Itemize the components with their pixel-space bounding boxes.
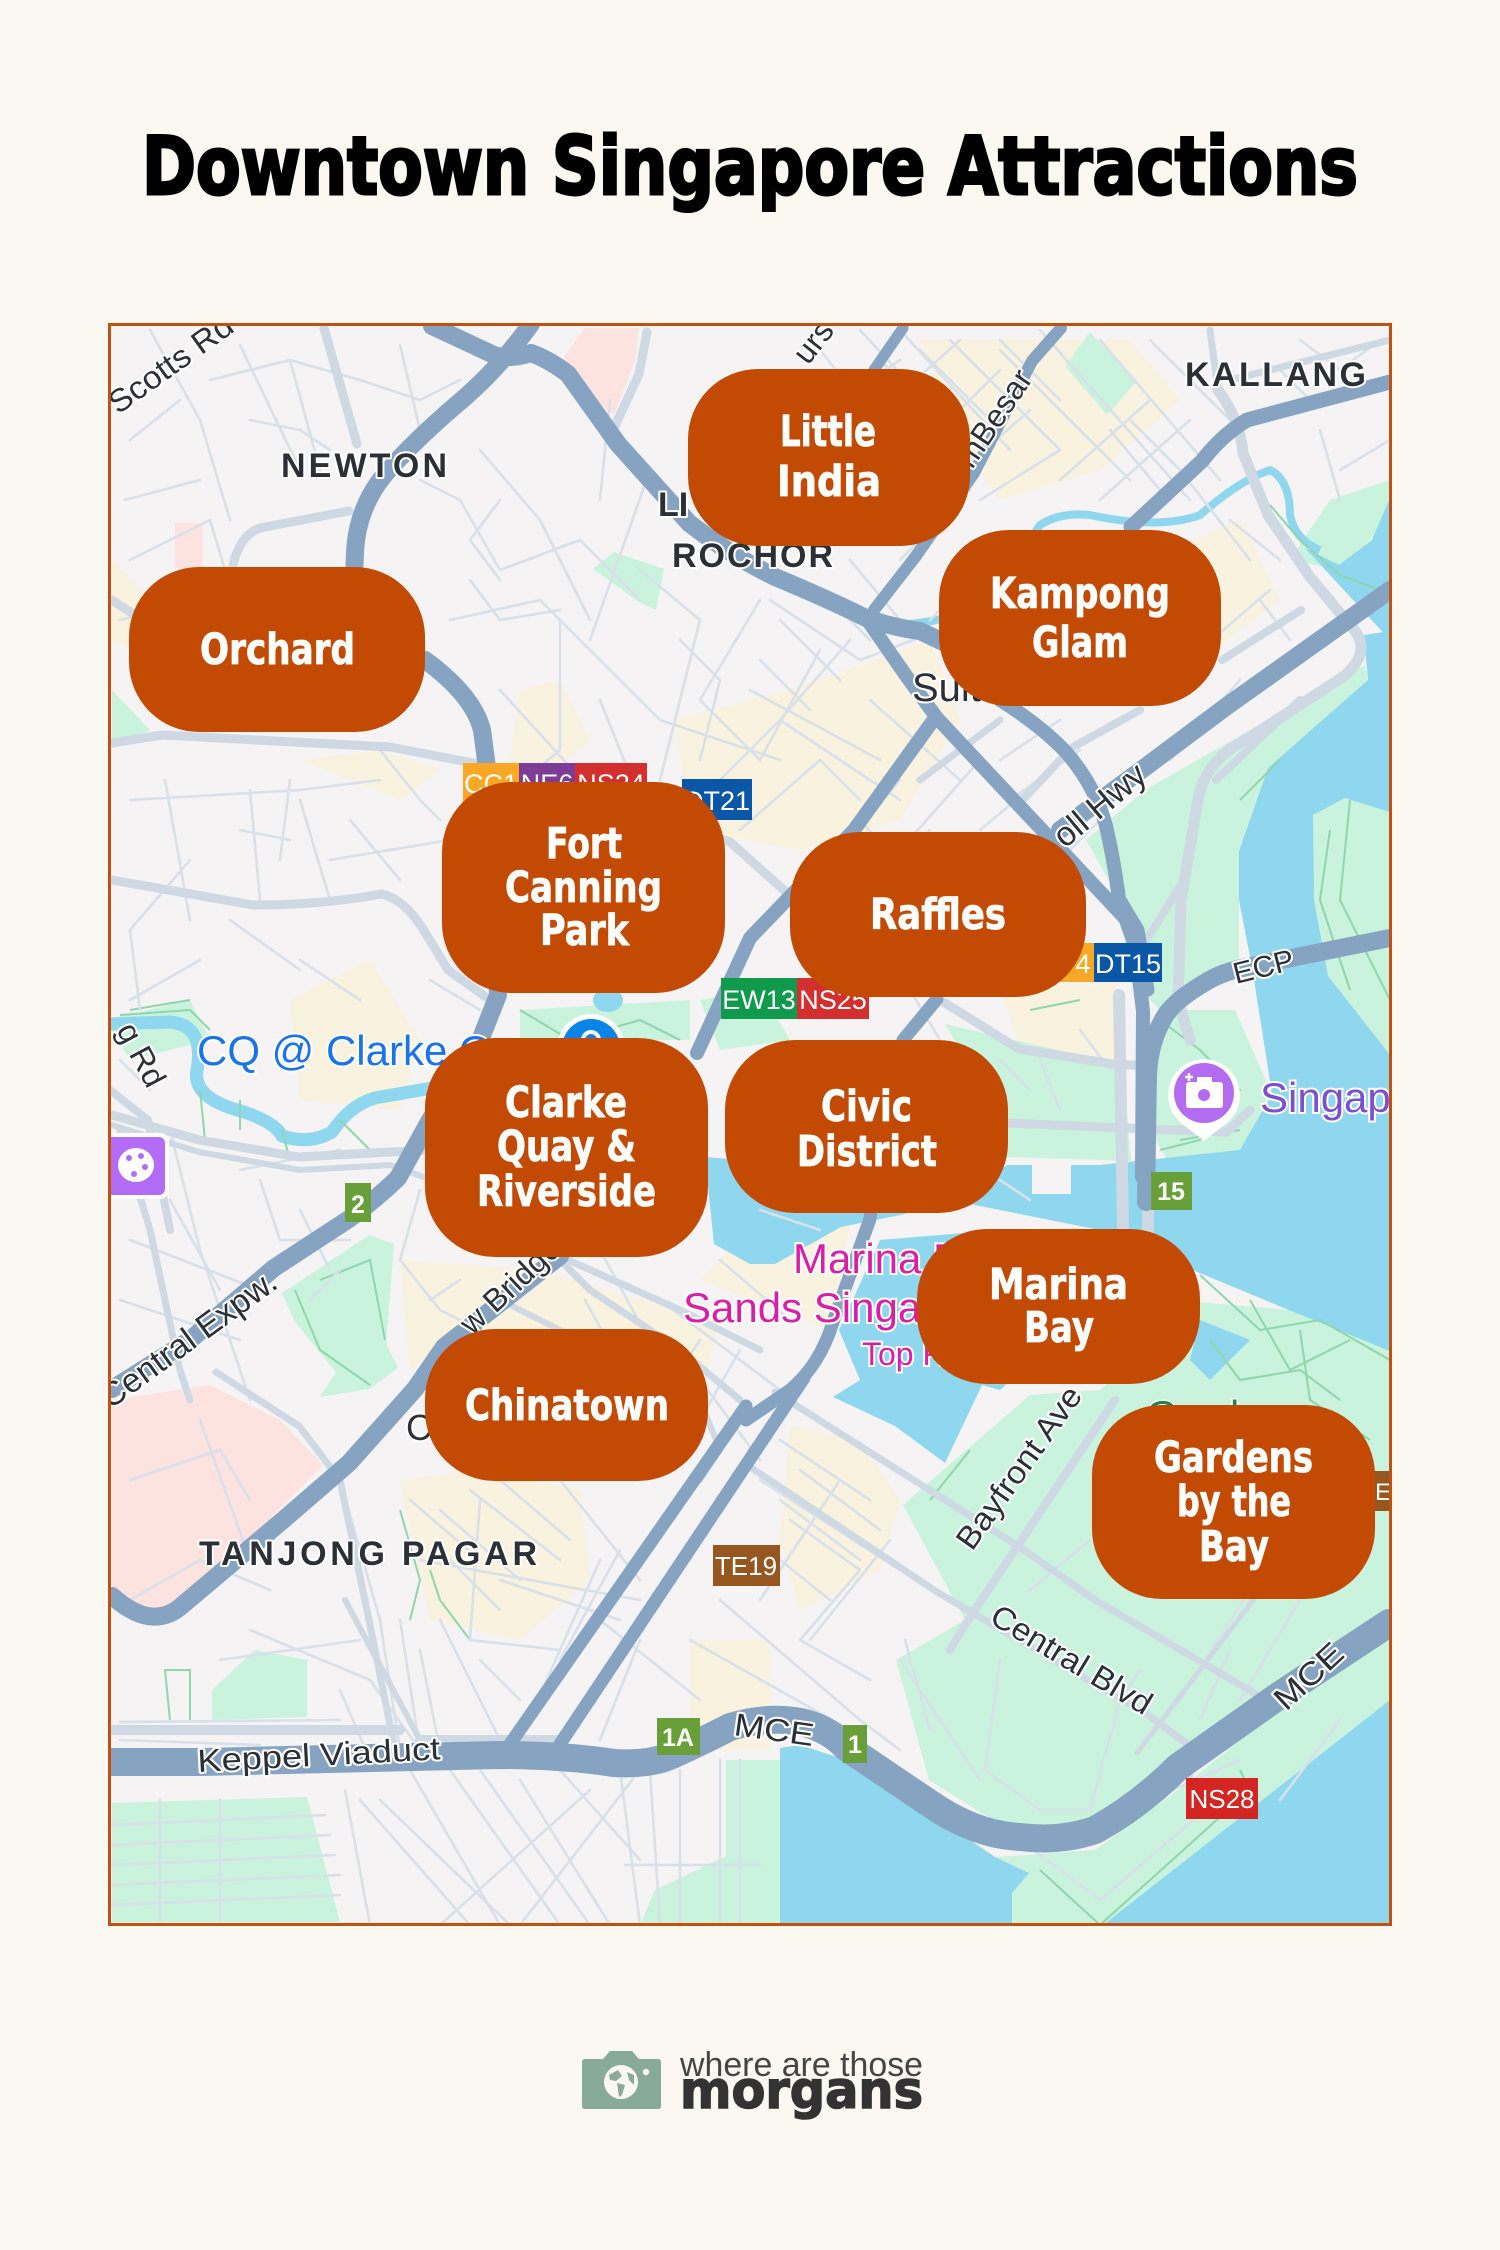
exit marker 2 — [345, 1183, 371, 1222]
map label: Keppel Viaduct: Keppel Viaduct — [196, 1730, 441, 1779]
transit badge: DT15: DT15 — [1095, 949, 1161, 979]
exit marker 1A: 1A — [662, 1724, 694, 1752]
callout: Little India: Little — [780, 408, 876, 457]
map water: sea, bay and river — [110, 470, 1390, 1925]
map label: CQ at Clarke Quay: CQ @ Clarke Quay — [197, 1027, 559, 1074]
transit badge: DT21: DT21 — [684, 786, 750, 816]
callout: Orchard: Orchard — [200, 626, 355, 675]
map label: Rochor: ROCHOR — [672, 537, 833, 575]
map label: Marina Bay Sands: Sands Singapore — [683, 1284, 1005, 1331]
map land use: parks and gardens — [105, 332, 1390, 1925]
map label: Sultan Gate: Sultan Gate — [912, 666, 1123, 710]
transit badge: Dhoby Ghaut CC1 NE6 NS24: NS24 — [577, 769, 645, 799]
map label: MCE east: MCE — [1266, 1635, 1351, 1717]
transit badge: Dhoby Ghaut CC1 NE6 NS24 — [463, 763, 647, 805]
callout: Orchard — [129, 567, 425, 732]
map label: New Bridge Rd: w Bridge — [451, 1230, 568, 1342]
map label: Bayfront Ave: Bayfront Ave — [948, 1379, 1089, 1556]
transit badge: DT15 — [1060, 943, 1162, 982]
map label: Toll Hwy: oll Hwy — [1046, 756, 1154, 855]
icon: purple art gallery palette — [100, 1133, 169, 1199]
exit marker 1A — [657, 1718, 700, 1755]
exit marker 2: 2 — [351, 1191, 365, 1219]
callout: Marina Bay — [917, 1229, 1200, 1384]
map label: Kallang: KALLANG — [1185, 356, 1366, 394]
callout: Kampong Glam — [939, 530, 1221, 706]
exit marker 15 — [1151, 1172, 1192, 1210]
map label: Marina Bay Sands — [682, 1240, 946, 1374]
logo wordmark: morgans — [680, 2061, 923, 2121]
transit badge: TE edge: E — [1375, 1479, 1391, 1506]
callout: Fort Canning Park: Park — [540, 907, 630, 956]
map label: Chinatown point: Ch — [406, 1407, 452, 1448]
map label: Singapore Flyer: Singap — [1260, 1074, 1391, 1121]
transit badge: TE19: TE19 — [715, 1551, 777, 1581]
exit marker 1: 1 — [848, 1731, 862, 1759]
callout: Civic District — [725, 1040, 1008, 1213]
map land use: garden island — [1313, 798, 1390, 1055]
callout: Kampong Glam: Glam — [1032, 619, 1128, 668]
callout: Gardens by the Bay: Bay — [1199, 1523, 1269, 1572]
map label: Little India district: LI — [658, 486, 688, 524]
map land use: residential and commercial areas — [112, 340, 1280, 1750]
transit badge: TE19 — [713, 1545, 780, 1586]
callout: Raffles — [790, 832, 1086, 997]
map paths: green park trails — [120, 505, 1390, 1925]
transit badge: DT15: 4 — [1075, 949, 1091, 979]
callout: Gardens by the Bay: Gardens — [1154, 1434, 1313, 1483]
map label: Gardens by the Bay: Gardens — [1146, 1392, 1307, 1439]
map label: road Rd: g Rd — [110, 1016, 173, 1093]
exit marker 1 — [843, 1725, 867, 1763]
map label: Central Expressway: Central Expw. — [92, 1262, 284, 1416]
callout: Kampong Glam: Kampong — [990, 570, 1170, 619]
callout: Gardens by the Bay: by the — [1177, 1478, 1291, 1527]
map frame — [110, 324, 1390, 1924]
callout: Clarke Quay and Riverside: Clarke — [505, 1079, 627, 1128]
map label: Newton: NEWTON — [281, 447, 447, 485]
transit badge: City Hall EW13 NS25 — [721, 978, 869, 1019]
pier on marina bay — [1032, 1163, 1071, 1194]
map label: Besar road: mBesar — [948, 362, 1040, 474]
callout: Raffles: Raffles — [870, 891, 1006, 940]
callout: Gardens by the Bay — [1092, 1405, 1375, 1599]
map label: Central Blvd: Central Blvd — [984, 1597, 1159, 1722]
map label: Marina Bay Sands: Top Rated — [862, 1336, 1008, 1372]
logo wordmark: where are those — [679, 2046, 923, 2084]
map land use: hospital area — [112, 328, 639, 1625]
map label: ECP: ECP — [1230, 944, 1298, 991]
transit badge: NS28 — [1186, 1778, 1258, 1819]
callout: Clarke Quay and Riverside: Quay & — [497, 1123, 636, 1172]
map roads: minor street network — [112, 330, 1390, 1925]
map label: road name fragment: urs — [785, 313, 841, 370]
transit badge: NS28: NS28 — [1189, 1784, 1255, 1814]
transit badge: City Hall EW13 NS25: EW13 — [722, 985, 796, 1015]
callout: Civic District: Civic — [821, 1083, 912, 1132]
map label: Tanjong Pagar: TANJONG PAGAR — [199, 1535, 537, 1573]
transit badge: Dhoby Ghaut CC1 NE6 NS24: CC1 — [464, 769, 518, 799]
callout: Marina Bay: Marina — [989, 1261, 1128, 1310]
map label: Marina Bay Sands: Marina Bay — [793, 1235, 1005, 1282]
map roads: secondary roads — [110, 328, 1390, 1775]
icon: purple camera pin — [1168, 1059, 1240, 1141]
callout: Civic District: District — [797, 1128, 937, 1177]
callout: Fort Canning Park — [442, 782, 725, 993]
callout: Fort Canning Park: Fort — [546, 820, 622, 869]
map label: Scotts Rd: Scotts Rd — [101, 307, 240, 421]
callout: Chinatown: Chinatown — [465, 1382, 669, 1431]
icon: camera with globe — [582, 2051, 661, 2109]
callout: Chinatown — [425, 1329, 708, 1481]
callout: Little India: India — [777, 458, 881, 507]
callout: Marina Bay: Bay — [1024, 1304, 1094, 1353]
icon: blue map pin — [557, 1014, 625, 1082]
transit badge: City Hall EW13 NS25: NS25 — [799, 985, 867, 1015]
callout: Clarke Quay and Riverside — [425, 1038, 708, 1257]
transit badge: Dhoby Ghaut CC1 NE6 NS24: NE6 — [521, 769, 573, 799]
map roads: expressways — [112, 324, 1390, 1838]
callout: Little India — [688, 369, 970, 546]
exit marker 15: 15 — [1157, 1178, 1185, 1206]
transit badge: DT21 — [682, 779, 752, 820]
callout: Fort Canning Park: Canning — [505, 864, 662, 913]
panel: map — [92, 307, 1392, 1925]
transit badge: TE edge — [1374, 1471, 1392, 1511]
callout: Clarke Quay and Riverside: Riverside — [477, 1168, 656, 1217]
logo: where are those morgans — [582, 2046, 923, 2121]
map label: MCE west: MCE — [732, 1706, 816, 1753]
